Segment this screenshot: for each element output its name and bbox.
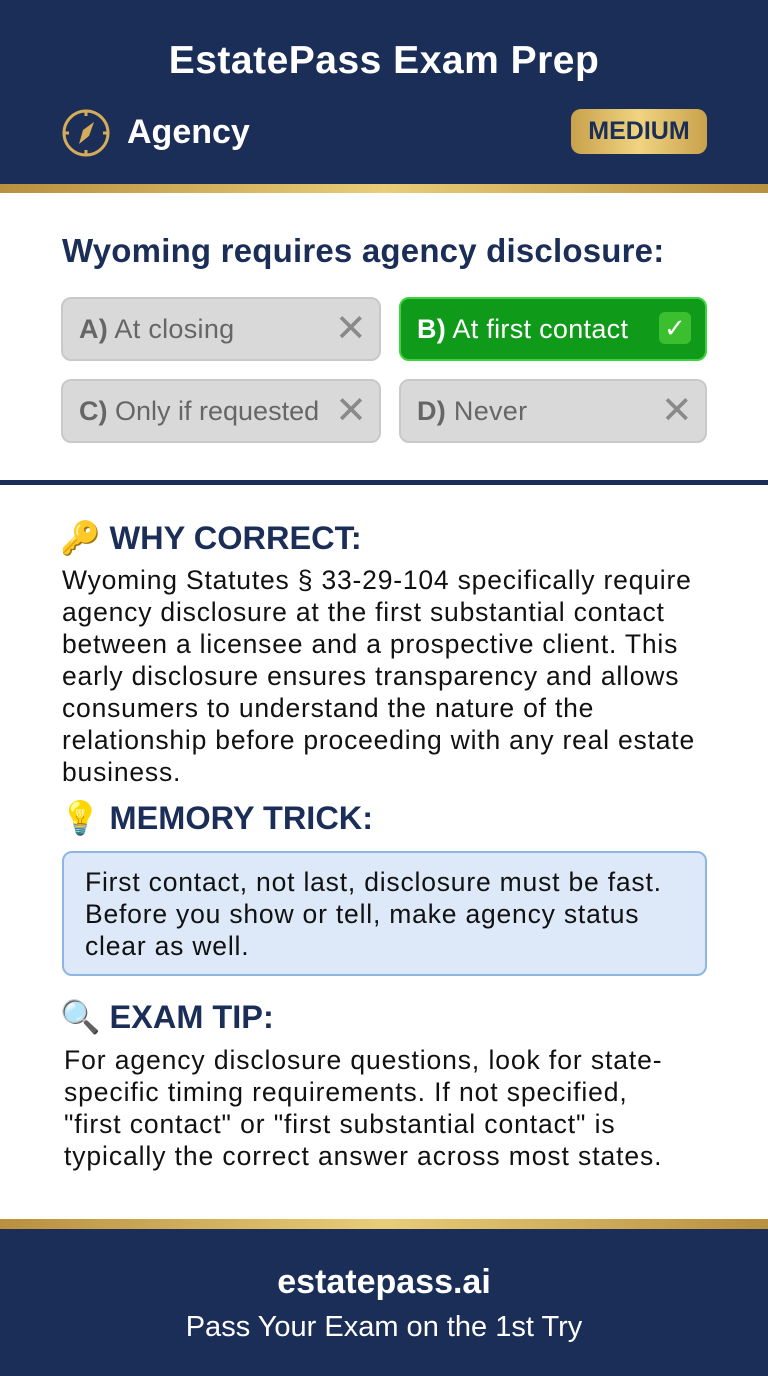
memory trick box: clear as well. xyxy=(85,931,249,961)
exam tip text: specific timing requirements. If not specified, xyxy=(64,1077,628,1107)
option B correct: B) At first contact xyxy=(417,314,628,344)
badge: medium: MEDIUM xyxy=(588,117,690,145)
option D: ✕ xyxy=(661,390,693,432)
answer options xyxy=(61,297,707,443)
option D: D) Never xyxy=(417,396,527,426)
footer tagline: Pass Your Exam on the 1st Try xyxy=(186,1311,582,1343)
heading: why correct: 🔑 WHY CORRECT: xyxy=(60,520,362,556)
exam tip text: typically the correct answer across most states. xyxy=(64,1141,662,1171)
exam tip text: "first contact" or "first substantial contact" is xyxy=(64,1109,616,1139)
explanation text: Wyoming Statutes § 33-29-104 specifically require xyxy=(62,565,692,595)
exam tip text: For agency disclosure questions, look for state- xyxy=(64,1045,662,1075)
option A: A) At closing xyxy=(79,314,234,344)
option D xyxy=(399,379,707,443)
explanation text: early disclosure ensures transparency and allows xyxy=(62,661,679,691)
option B correct: ✓ xyxy=(664,313,686,343)
option C xyxy=(61,379,381,443)
explanation text: between a licensee and a prospective client. This xyxy=(62,629,678,659)
exam tip text xyxy=(64,1045,662,1171)
footer xyxy=(0,1229,768,1376)
footer url: estatepass.ai xyxy=(277,1263,491,1301)
header xyxy=(0,0,768,184)
explanation text: agency disclosure at the first substantial contact xyxy=(62,597,665,627)
explanation text xyxy=(62,565,695,787)
memory trick box xyxy=(62,851,707,976)
heading: memory trick: 💡 MEMORY TRICK: xyxy=(60,800,373,836)
explanation text: consumers to understand the nature of the xyxy=(62,693,594,723)
option C: C) Only if requested xyxy=(79,396,319,426)
memory trick box: First contact, not last, disclosure must be fast. xyxy=(85,867,662,897)
title: EstatePass Exam Prep xyxy=(169,39,599,82)
option A xyxy=(61,297,381,361)
explanation text: relationship before proceeding with any real estate xyxy=(62,725,695,755)
explanation text: business. xyxy=(62,757,181,787)
icon: compass xyxy=(62,110,110,156)
question: Wyoming requires agency disclosure: xyxy=(62,232,664,269)
badge: medium xyxy=(571,109,707,154)
heading: exam tip: 🔍 EXAM TIP: xyxy=(60,999,274,1035)
memory trick box: Before you show or tell, make agency status xyxy=(85,899,639,929)
option B correct xyxy=(399,297,707,361)
option C: ✕ xyxy=(335,390,367,432)
category label: Agency xyxy=(127,113,250,151)
option A: ✕ xyxy=(335,308,367,350)
